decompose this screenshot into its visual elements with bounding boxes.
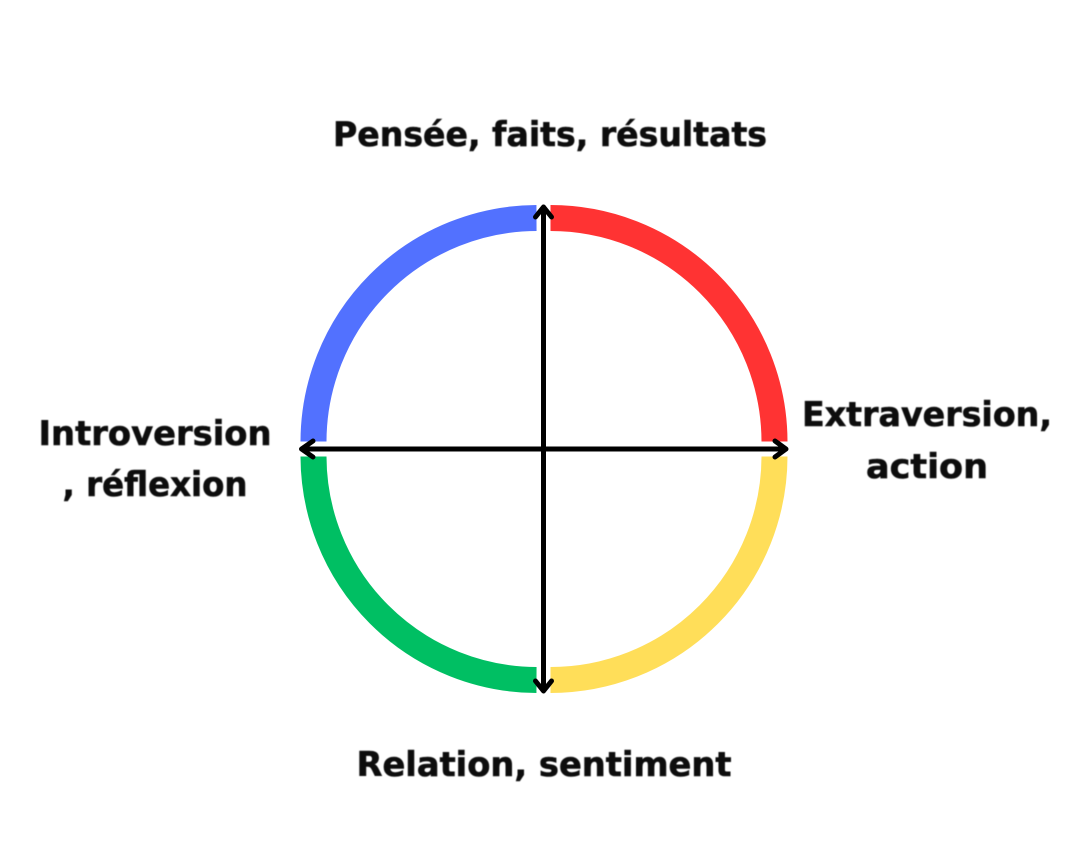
heading: top label: Pensée, faits, résultats xyxy=(333,115,767,155)
arrow: horizontal axis xyxy=(302,441,786,457)
arc: yellow quadrant xyxy=(550,456,774,680)
arrow: vertical axis xyxy=(536,207,552,691)
arc: red quadrant xyxy=(550,218,774,442)
heading: bottom label: Relation, sentiment xyxy=(356,745,732,785)
heading: left label: Introversion xyxy=(38,414,272,454)
heading: left label: , réflexion xyxy=(62,465,248,505)
heading: right label: action xyxy=(866,447,988,487)
arc: green quadrant xyxy=(314,456,536,680)
heading: right label xyxy=(802,395,1052,487)
heading: left label xyxy=(38,414,272,505)
arc: blue quadrant xyxy=(314,218,536,442)
heading: right label: Extraversion, xyxy=(802,395,1052,435)
